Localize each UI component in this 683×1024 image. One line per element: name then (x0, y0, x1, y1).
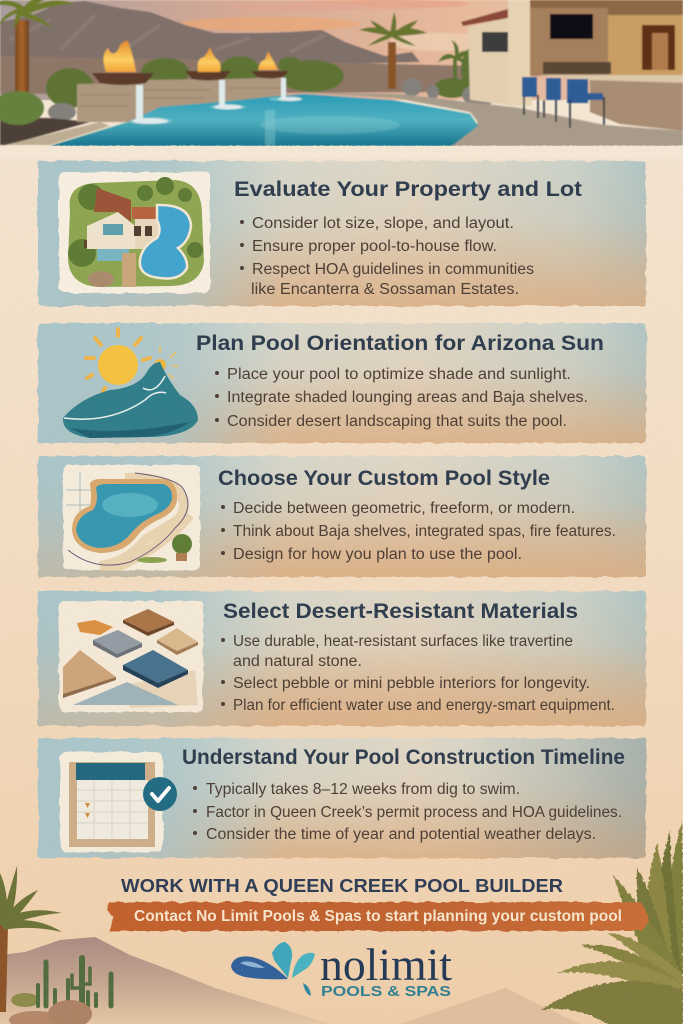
kidney pool (140, 205, 191, 279)
palm: lower right (540, 820, 683, 1024)
icon card: stone samples (59, 601, 203, 712)
bullets: Consider lot size, slope, and layout. (252, 215, 514, 232)
door (642, 25, 675, 70)
panel: desert-resistant materials (38, 591, 646, 726)
logo: No Limit Pools & Spas (231, 940, 453, 1000)
bullets: Use durable, heat-resistant surfaces like travertine (233, 633, 573, 650)
icon card: calendar (60, 752, 177, 852)
patio (295, 92, 683, 146)
bar clutter (543, 62, 611, 74)
rocks (48, 78, 498, 121)
panel: construction timeline (38, 738, 646, 858)
call to action banner (107, 902, 650, 931)
orange tile (77, 620, 113, 635)
panel: pool orientation (38, 323, 646, 443)
bullets: Consider desert landscaping that suits the pool. (227, 413, 567, 430)
mountain ridges (10, 15, 325, 52)
desert mountains bottom left (0, 937, 330, 1024)
bullets: Place your pool to optimize shade and sunlight. (227, 366, 571, 383)
panel background (38, 456, 646, 577)
palm: right small (438, 40, 468, 80)
palm: lower left (0, 866, 62, 1012)
bullets: Typically takes 8–12 weeks from dig to swim. (206, 781, 520, 798)
bullets: Consider the time of year and potential weather delays. (206, 826, 596, 843)
icon card: property plan (59, 172, 210, 293)
panel: custom pool style (38, 456, 646, 577)
bullets: Plan for efficient water use and energy-smart equipment. (233, 697, 615, 714)
heading: Understand Your Pool Construction Timeline (182, 746, 625, 769)
heading: Evaluate Your Property and Lot (234, 178, 582, 201)
television (550, 14, 593, 39)
mountains (0, 1, 420, 72)
grey tile (93, 630, 142, 654)
large wood tile (63, 650, 116, 694)
distant hill right (400, 988, 580, 1024)
palm: left (0, 0, 76, 92)
bullets: Respect HOA guidelines in communities (252, 261, 534, 278)
counter (537, 75, 683, 82)
triangle paver (73, 682, 178, 705)
icon: sun over pool (63, 329, 198, 438)
rock (88, 271, 114, 287)
stone spillway wall (77, 77, 287, 122)
torn hero edge (0, 146, 683, 158)
coping (5, 122, 110, 145)
bullets (221, 500, 616, 563)
sunset sky (0, 0, 683, 100)
brown tile (123, 609, 174, 632)
shrubs (46, 48, 470, 108)
panel background (38, 591, 646, 726)
panel background (38, 323, 646, 443)
house (94, 188, 131, 222)
bullets: Decide between geometric, freeform, or modern. (233, 500, 575, 517)
palm: center (359, 12, 427, 89)
cacti and rocks (9, 958, 111, 1024)
logo splash icon (231, 942, 315, 979)
bullets: like Encanterra & Sossaman Estates. (251, 281, 519, 298)
panel: evaluate property (38, 161, 646, 306)
ground and left plants (0, 118, 90, 145)
bullets: Ensure proper pool-to-house flow. (252, 238, 497, 255)
flames (103, 41, 278, 72)
hero photo: backyard pool (0, 0, 683, 146)
waterfalls (132, 78, 302, 124)
logo tagline: POOLS & SPAS (321, 983, 451, 1000)
left wing house (468, 18, 508, 105)
heading: Select Desert-Resistant Materials (223, 600, 578, 623)
panel background (38, 738, 646, 858)
call to action heading: WORK WITH A QUEEN CREEK POOL BUILDER (121, 876, 563, 896)
icon card: pool blueprint (63, 465, 200, 570)
pool water (50, 94, 478, 146)
logo droplet (303, 983, 311, 996)
panel background (38, 161, 646, 306)
bullets: Select pebble or mini pebble interiors for longevity. (233, 675, 590, 692)
outdoor kitchen pavilion (508, 0, 532, 106)
bullets: Integrate shaded lounging areas and Baja shelves. (227, 389, 588, 406)
back wall (0, 56, 480, 94)
blue bar stools (522, 77, 603, 103)
heading: Choose Your Custom Pool Style (218, 467, 550, 490)
bullets: Think about Baja shelves, integrated spas, fire features. (233, 523, 616, 540)
bullets (193, 781, 622, 843)
bullets (240, 215, 534, 298)
bullets (215, 366, 588, 430)
water highlights (128, 97, 400, 145)
banner text: Contact No Limit Pools & Spas to start planning your custom pool (134, 908, 622, 925)
blue pebble tile (123, 650, 188, 683)
bullets: Design for how you plan to use the pool. (233, 546, 522, 563)
logo wordmark: nolimit (320, 940, 453, 990)
bullets: Factor in Queen Creek’s permit process and HOA guidelines. (206, 804, 622, 821)
bullets (221, 633, 615, 714)
sky streaks (180, 0, 490, 51)
bullets: and natural stone. (233, 653, 362, 670)
heading: Plan Pool Orientation for Arizona Sun (196, 332, 604, 355)
fire bowls (92, 71, 289, 85)
sand tile (157, 628, 198, 651)
